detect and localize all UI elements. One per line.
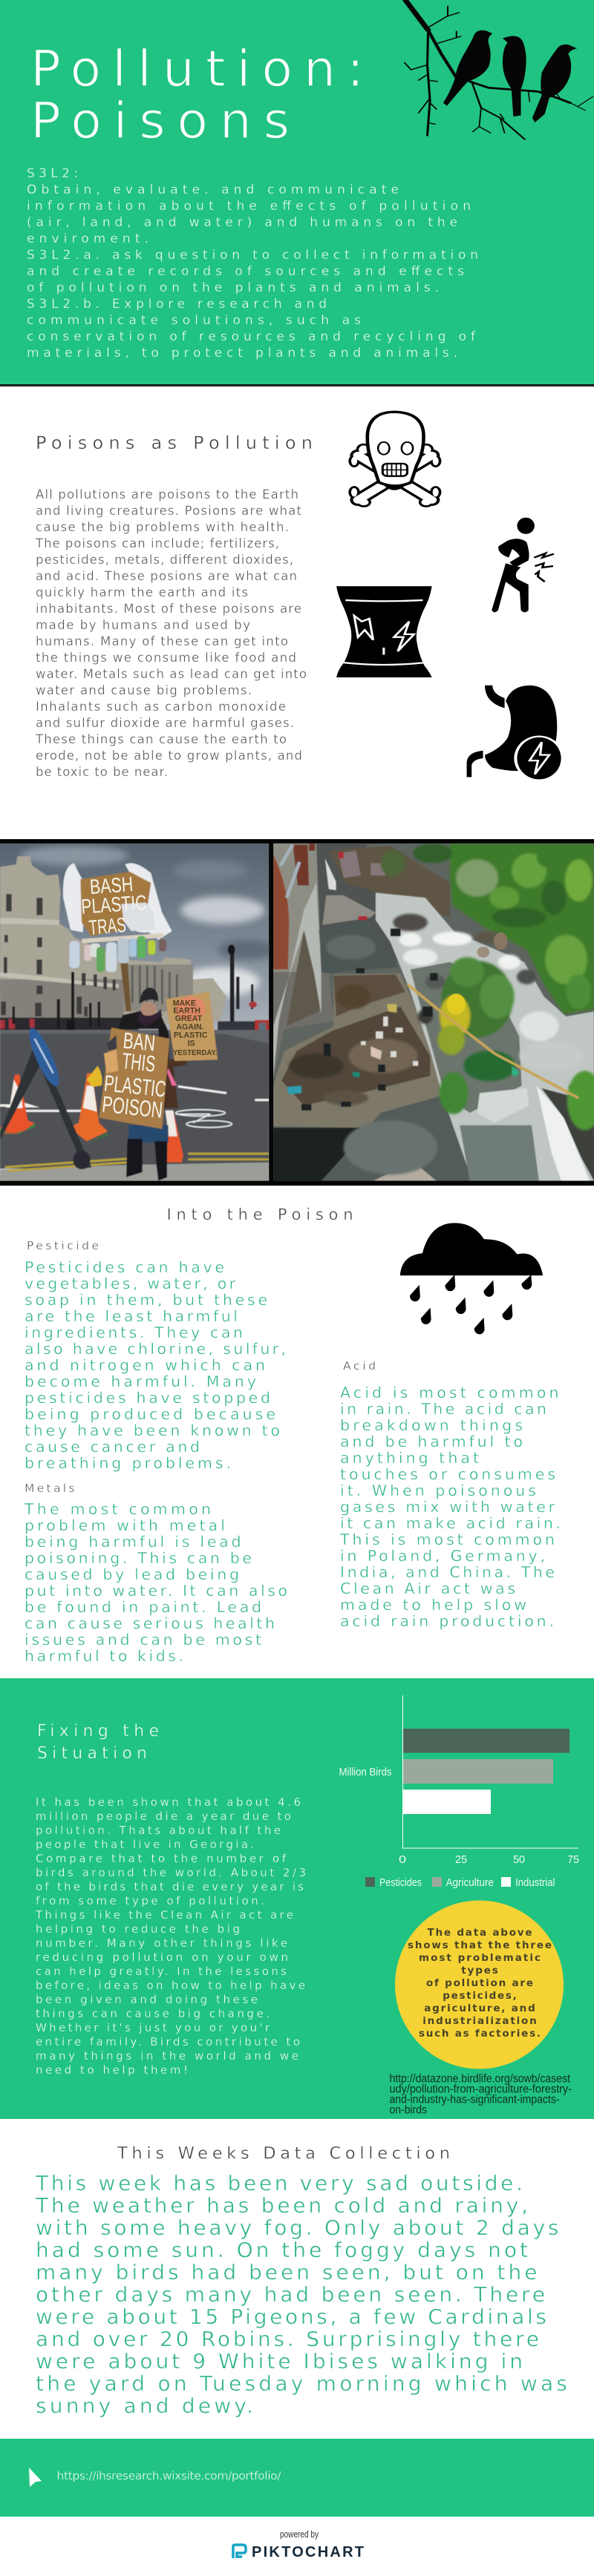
text block: acid: made to help slow bbox=[340, 1596, 526, 1614]
photo sign text: THIS bbox=[121, 1048, 157, 1077]
text block: poisons intro: humans. Many of these can get into bbox=[36, 634, 288, 648]
text block: standards: S3L2: bbox=[27, 166, 78, 181]
text block: poisons intro: pesticides, metals, different dioxides, bbox=[36, 553, 293, 567]
text block: metals bbox=[24, 1482, 287, 1665]
text block: fixing: number. Many other things like bbox=[36, 1936, 287, 1950]
text block: acid: acid rain production. bbox=[340, 1612, 554, 1630]
text block: standards: communicate solutions, such as bbox=[27, 313, 361, 328]
text block: fixing: Whether it's just you or you'r bbox=[36, 2021, 270, 2034]
text block: pesticide: ingredients. They can bbox=[25, 1324, 243, 1341]
text block: acid bbox=[339, 1359, 561, 1630]
icon: skull and crossbones with gas mask bbox=[348, 412, 441, 507]
text block: standards: of pollution on the plants and animals. bbox=[27, 280, 439, 295]
title: Poisons bbox=[30, 92, 290, 151]
photo: plastic protest in London: GREAT bbox=[175, 1014, 203, 1023]
text block: weekly observations: many birds had been seen, but on the bbox=[36, 2260, 538, 2284]
text block: pesticide: breathing problems. bbox=[25, 1454, 231, 1472]
heading: This Weeks Data Collection bbox=[117, 2144, 450, 2163]
photo sign text: POISON bbox=[101, 1091, 164, 1123]
photo: plastic protest in London: IS bbox=[188, 1039, 195, 1048]
text block: weekly observations bbox=[35, 2171, 567, 2418]
axis ticks: 25 bbox=[455, 1853, 467, 1866]
text block: pesticide: pesticides have stopped bbox=[25, 1389, 270, 1407]
callout: yellow data note: such as factories. bbox=[419, 2028, 541, 2040]
callout: yellow data note: industrialization bbox=[422, 2015, 537, 2027]
photo: polluted river bbox=[273, 844, 594, 1181]
text block: poisons intro: The poisons can include; fertilizers, bbox=[35, 536, 279, 551]
panel: portfolio footer band bbox=[0, 2439, 594, 2517]
source link: and-industry-has-significant-impacts- bbox=[389, 2094, 560, 2106]
axis label: Million Birds bbox=[339, 1766, 392, 1778]
photo sign text: PLASTIC bbox=[103, 1071, 167, 1103]
photo: plastic protest in London: AGAIN. bbox=[176, 1022, 204, 1031]
text block: pesticide: they have been known to bbox=[25, 1422, 280, 1439]
text block: poisons intro bbox=[35, 487, 307, 779]
bar: pesticides bbox=[403, 1729, 569, 1752]
text block: acid: Clean Air act was bbox=[340, 1580, 515, 1597]
icon: stomach bbox=[467, 686, 564, 781]
text block: acid: Acid is most common bbox=[340, 1384, 558, 1402]
text block: metals: problem with metal bbox=[25, 1517, 225, 1534]
heading: Fixing the bbox=[37, 1722, 159, 1741]
panel: poisons as pollution bbox=[35, 412, 564, 781]
text block: acid: anything that bbox=[340, 1449, 479, 1467]
text block: fixing: from some type of pollution. bbox=[36, 1894, 264, 1908]
icon: Piktochart logo bbox=[233, 2545, 246, 2558]
text block: pesticide: cause cancer and bbox=[25, 1438, 200, 1456]
portfolio link: https://ihsresearch.wixsite.com/portfolio/ bbox=[56, 2469, 281, 2483]
bar: industrial bbox=[403, 1790, 491, 1814]
photo sign text: PLASTIC bbox=[80, 891, 148, 919]
legend: Pesticides bbox=[379, 1876, 422, 1889]
legend: Industrial bbox=[515, 1876, 555, 1889]
icon: cursor arrow bbox=[29, 2468, 42, 2487]
text block: fixing: helping to reduce the big bbox=[36, 1922, 240, 1936]
subheading: Pesticide bbox=[27, 1239, 99, 1252]
panel: header bbox=[0, 0, 594, 387]
icon: person in pain bbox=[492, 518, 554, 612]
text block: poisons intro: inhabitants. Most of these poisons are bbox=[36, 602, 301, 616]
text block: fixing: before, ideas on how to help have bbox=[36, 1979, 305, 1992]
text block: metals: issues and can be most bbox=[25, 1631, 261, 1649]
heading: Situation bbox=[37, 1744, 147, 1763]
text block: acid: This is most common bbox=[339, 1531, 555, 1548]
text block: standards: enviroment. bbox=[27, 231, 148, 246]
panel: data collection bbox=[35, 2144, 567, 2418]
callout: yellow data note: shows that the three bbox=[408, 1939, 552, 1951]
text block: fixing: pollution. Thats about half the bbox=[36, 1824, 281, 1837]
callout: yellow data note: The data above bbox=[428, 1927, 532, 1939]
text block: poisons intro: and living creatures. Posions are what bbox=[36, 504, 302, 518]
text block: standards: S3L2.a. ask question to collect information bbox=[27, 248, 478, 263]
text block: standards: S3L2.b. Explore research and bbox=[27, 297, 327, 312]
text block: standards: conservation of resources and recycling of bbox=[27, 329, 476, 344]
source link: udy/pollution-from-agriculture-forestry- bbox=[389, 2083, 572, 2095]
text block: standards bbox=[27, 166, 478, 361]
icon: birds on a branch bbox=[405, 0, 593, 139]
text block: standards: (air, land, and water) and humans on the bbox=[27, 215, 457, 230]
callout: yellow data note: types bbox=[461, 1965, 498, 1977]
text block: pesticide: vegetables, water, or bbox=[25, 1275, 236, 1292]
text block: poisons intro: and sulfur dioxide are harmful gases. bbox=[36, 716, 294, 730]
photo sign text: TRAS bbox=[88, 913, 127, 939]
text block: metals: can cause serious health bbox=[25, 1614, 275, 1632]
text block: poisons intro: the things we consume like food and bbox=[36, 651, 296, 665]
text block: weekly observations: with some heavy fog. Only about 2 days bbox=[36, 2215, 558, 2240]
legend bbox=[365, 1876, 555, 1889]
text block: fixing: many things in the world and we bbox=[36, 2049, 298, 2063]
text block: acid: breakdown things bbox=[340, 1416, 523, 1434]
text block: pesticide: soap in them, but these bbox=[25, 1291, 267, 1309]
text block: poisons intro: water. Metals such as lead can get into bbox=[36, 667, 307, 681]
callout: yellow data note: most problematic bbox=[419, 1952, 541, 1964]
text block: fixing: million people die a year due to bbox=[36, 1810, 291, 1823]
panel: into the poison bbox=[24, 1206, 561, 1665]
text block: weekly observations: other days many had been seen. There bbox=[36, 2282, 545, 2307]
text block: acid: India, and China. The bbox=[340, 1563, 555, 1581]
bar chart bbox=[339, 1695, 579, 1889]
photo sign text: BASH bbox=[89, 873, 134, 898]
text block: fixing: can help greatly. In the lessons bbox=[36, 1965, 287, 1978]
icon: acid rain cloud bbox=[400, 1223, 543, 1334]
text block: pesticide bbox=[25, 1239, 286, 1472]
bar: agriculture bbox=[403, 1759, 553, 1784]
callout: yellow data note: agriculture, and bbox=[424, 2002, 535, 2014]
heading: Poisons as Pollution bbox=[36, 433, 313, 453]
text block: metals: caused by lead being bbox=[25, 1565, 239, 1583]
text block: weekly observations: sunny and dewy. bbox=[36, 2393, 253, 2418]
source link: http://datazone.birdlife.org/sowb/casest bbox=[389, 2073, 571, 2085]
axis ticks: 75 bbox=[567, 1853, 579, 1866]
title: Pollution: bbox=[30, 40, 364, 99]
photo: plastic protest in London bbox=[0, 844, 277, 1181]
text block: fixing: Things like the Clean Air act are bbox=[35, 1908, 293, 1922]
text block: metals: put into water. It can also bbox=[25, 1582, 287, 1600]
text block: acid: it. When poisonous bbox=[340, 1482, 536, 1499]
text block: metals: poisoning. This can be bbox=[25, 1549, 252, 1567]
text block: poisons intro: made by humans and used by bbox=[36, 618, 250, 632]
text block: acid: in rain. The acid can bbox=[340, 1400, 546, 1418]
icon: chemical packet bbox=[336, 586, 432, 677]
credit: powered by Piktochart: powered by bbox=[280, 2529, 319, 2540]
text block: poisons intro: and acid. These posions are what can bbox=[36, 569, 297, 583]
wordmark: PIKTOCHART bbox=[252, 2544, 364, 2560]
text block: poisons intro: be toxic to be near. bbox=[36, 765, 168, 779]
title bbox=[30, 40, 364, 151]
text block: metals: be found in paint. Lead bbox=[25, 1598, 261, 1616]
text block: acid: touches or consumes bbox=[340, 1465, 555, 1483]
text block: standards: information about the effects of pollution bbox=[27, 199, 471, 214]
panel: fixing the situation bbox=[0, 1678, 594, 2119]
text block: metals: The most common bbox=[24, 1500, 211, 1518]
text block: standards: materials, to protect plants and animals. bbox=[27, 346, 457, 361]
text block: pesticide: also have chlorine, sulfur, bbox=[25, 1340, 286, 1358]
text block: fixing: people that live in Georgia. bbox=[36, 1838, 254, 1851]
callout: yellow data note: of pollution are bbox=[426, 1977, 533, 1989]
text block: metals: being harmful is lead bbox=[25, 1533, 241, 1551]
text block: pesticide: being produced because bbox=[25, 1405, 275, 1423]
photo: plastic protest in London: MAKE bbox=[173, 999, 196, 1008]
axis ticks bbox=[399, 1853, 579, 1866]
text block: fixing: It has been shown that about 4.6 bbox=[36, 1795, 301, 1809]
text block: fixing: need to help them! bbox=[36, 2063, 188, 2077]
photo: plastic protest in London: EARTH bbox=[173, 1007, 200, 1016]
text block: weekly observations: and over 20 Robins. Surprisingly there bbox=[36, 2327, 539, 2351]
axis ticks: 50 bbox=[513, 1853, 525, 1866]
text block: fixing: Compare that to the number of bbox=[36, 1852, 287, 1865]
text block: poisons intro: Inhalants such as carbon monoxide bbox=[36, 700, 286, 714]
text block: poisons intro: erode, not be able to grow plants, and bbox=[36, 749, 302, 763]
credit: powered by Piktochart bbox=[233, 2529, 364, 2560]
text block: poisons intro: water and cause big problems. bbox=[36, 683, 252, 697]
text block: standards: and create records of sources and effects bbox=[27, 264, 464, 279]
photo sign text: BAN bbox=[122, 1028, 157, 1056]
text block: weekly observations: had some sun. On the foggy days not bbox=[36, 2238, 528, 2262]
source link bbox=[389, 2073, 572, 2116]
text block: acid: in Poland, Germany, bbox=[340, 1547, 545, 1565]
subheading: Acid bbox=[343, 1359, 376, 1373]
heading: Into the Poison bbox=[166, 1206, 353, 1223]
text block: poisons intro: cause the big problems with health. bbox=[36, 520, 289, 534]
heading bbox=[37, 1722, 159, 1763]
photo: plastic protest in London: YESTERDAY. bbox=[173, 1049, 218, 1057]
text block: pesticide: become harmful. Many bbox=[25, 1373, 256, 1390]
text block: fixing: been given and doing these bbox=[36, 1993, 258, 2006]
legend: Agriculture bbox=[446, 1876, 494, 1889]
text block: weekly observations: The weather has been cold and rainy, bbox=[35, 2193, 528, 2218]
text block: poisons intro: quickly harm the earth and its bbox=[36, 585, 248, 599]
photo: plastic protest in London: PLASTIC bbox=[174, 1031, 208, 1039]
text block: fixing: birds around the world. About 2/3 bbox=[36, 1866, 306, 1879]
text block: pesticide: and nitrogen which can bbox=[25, 1356, 265, 1374]
callout: yellow data note: pesticides, bbox=[443, 1990, 517, 2002]
text block: poisons intro: These things can cause the earth to bbox=[35, 732, 287, 746]
subheading: Metals bbox=[25, 1482, 74, 1495]
text block: poisons intro: All pollutions are poisons to the Earth bbox=[36, 487, 298, 502]
text block: acid: gases mix with water bbox=[340, 1498, 555, 1516]
text block: weekly observations: were about 15 Pigeons, a few Cardinals bbox=[36, 2304, 546, 2329]
text block: weekly observations: were about 9 White Ibises walking in bbox=[36, 2349, 523, 2373]
text block: standards: Obtain, evaluate. and communicate bbox=[27, 183, 399, 197]
source link: on-birds bbox=[389, 2104, 427, 2116]
text block: fixing: things can cause big change. bbox=[36, 2007, 270, 2020]
text block: weekly observations: This week has been very sad outside. bbox=[35, 2171, 523, 2195]
panel: photos bbox=[0, 839, 594, 1186]
axis ticks: 0 bbox=[399, 1853, 406, 1866]
text block: pesticide: are the least harmful bbox=[25, 1307, 238, 1325]
text block: fixing: of the birds that die every year is bbox=[36, 1880, 304, 1893]
callout: yellow data note bbox=[395, 1901, 564, 2069]
text block: acid: it can make acid rain. bbox=[340, 1514, 561, 1532]
text block: metals: harmful to kids. bbox=[25, 1647, 183, 1665]
text block: pesticide: Pesticides can have bbox=[25, 1258, 224, 1276]
text block: acid: and be harmful to bbox=[340, 1433, 523, 1450]
photo sign text bbox=[80, 873, 167, 1123]
text block: fixing: reducing pollution on your own bbox=[36, 1951, 288, 1964]
text block: weekly observations: the yard on Tuesday morning which was bbox=[36, 2371, 567, 2396]
text block: fixing bbox=[35, 1795, 306, 2077]
text block: fixing: entire family. Birds contribute to bbox=[36, 2035, 300, 2048]
